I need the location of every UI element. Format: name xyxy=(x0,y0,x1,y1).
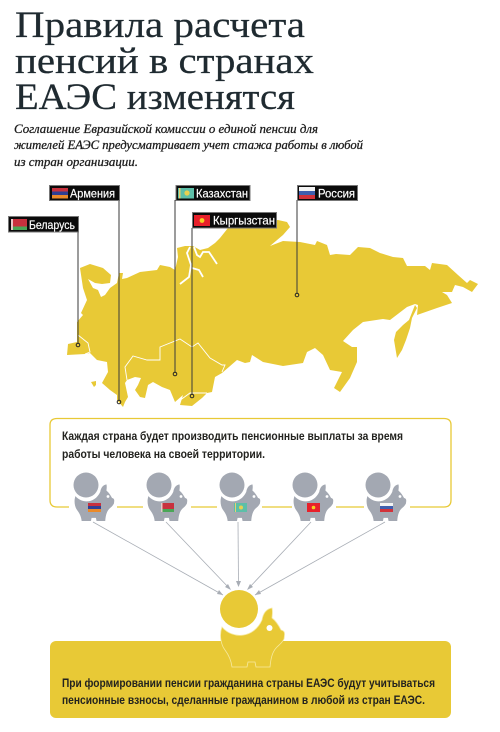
title: ЕАЭС изменятся xyxy=(15,76,295,117)
flag: Казахстан xyxy=(178,188,194,198)
flag: Кыргызстан xyxy=(194,215,210,226)
panel text xyxy=(62,678,435,707)
panel text: При формировании пенсии гражданина страны ЕАЭС будут учитываться xyxy=(62,678,435,690)
label: Казахстан: Казахстан xyxy=(196,186,248,200)
label: Казахстан xyxy=(173,186,250,376)
large yellow piggy bank xyxy=(220,590,285,667)
piggy bank: Кыргызстан xyxy=(292,472,333,521)
label: Россия xyxy=(295,186,358,297)
label: Армения: Армения xyxy=(70,186,115,200)
label: Беларусь xyxy=(8,216,80,347)
northern gulfs xyxy=(180,247,217,284)
panel text: пенсионные взносы, сделанные гражданином в любой из стран ЕАЭС. xyxy=(62,695,425,707)
Sakhalin xyxy=(394,305,417,358)
flag: Беларусь xyxy=(11,219,27,230)
panel text: Каждая страна будет производить пенсионные выплаты за время xyxy=(62,431,403,443)
subtitle: жителей ЕАЭС предусматривает учет стажа работы в любой xyxy=(14,137,363,152)
arrows to the common pension xyxy=(93,522,385,595)
panel text: работы человека на своей территории. xyxy=(62,449,265,461)
label: Армения xyxy=(50,186,121,404)
panel: national payments xyxy=(50,418,451,507)
label: Кыргызстан: Кыргызстан xyxy=(213,214,275,228)
piggy bank: Россия xyxy=(366,472,406,521)
subtitle: Соглашение Евразийской комиссии о единой пенсии для xyxy=(14,121,318,136)
label: Россия: Россия xyxy=(318,186,355,200)
label: Беларусь: Беларусь xyxy=(29,218,75,232)
piggy bank: Армения xyxy=(74,472,114,521)
Kazakhstan and Kyrgyzstan borders xyxy=(78,335,225,401)
Crimea islet xyxy=(91,381,96,387)
panel text xyxy=(62,431,403,461)
piggy bank: Беларусь xyxy=(146,472,187,521)
subtitle: из стран организации. xyxy=(14,154,138,169)
map of EAEU countries xyxy=(67,220,478,407)
piggy bank: Казахстан xyxy=(220,472,260,521)
label: Кыргызстан xyxy=(190,212,276,398)
title: Правила расчета xyxy=(15,4,305,45)
title: пенсий в странах xyxy=(15,40,314,81)
title xyxy=(15,4,314,117)
panel: common pension xyxy=(50,641,451,718)
flag: Армения xyxy=(52,188,68,198)
flag: Россия xyxy=(299,187,315,199)
subtitle xyxy=(14,121,363,169)
